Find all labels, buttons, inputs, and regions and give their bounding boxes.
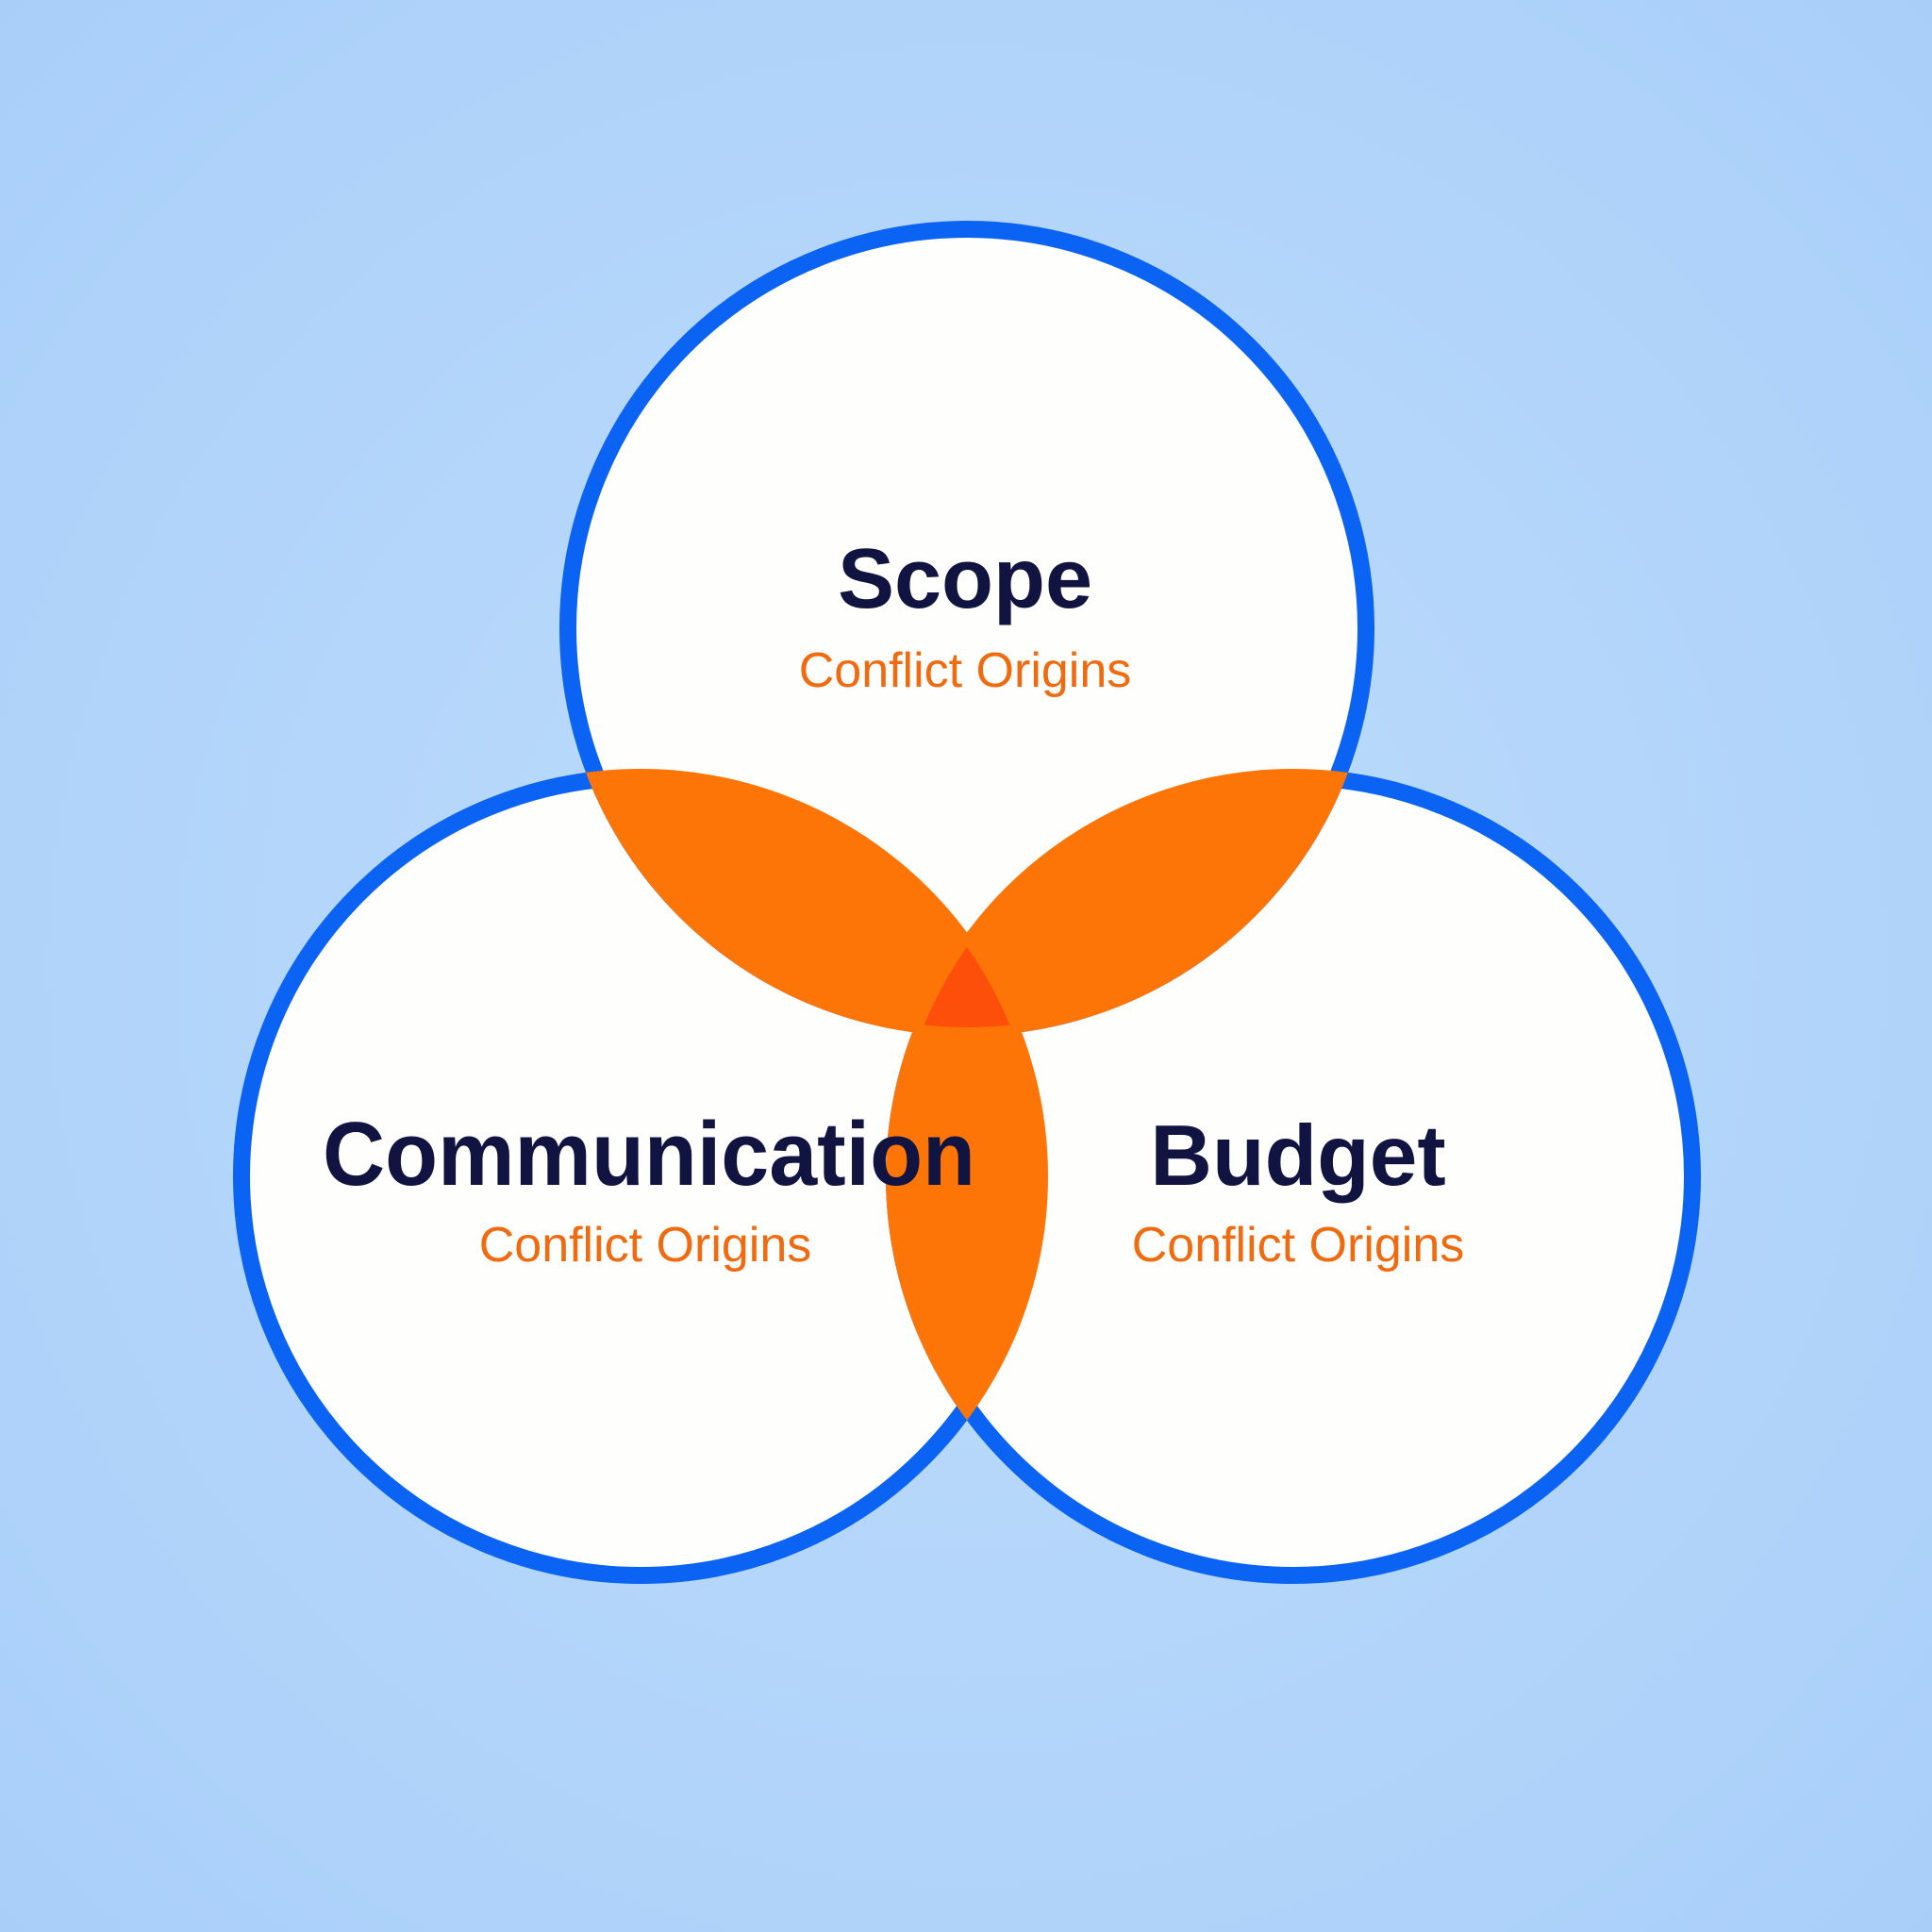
overlap: scope & budget — [967, 769, 1348, 1032]
label: scope: Scope — [838, 532, 1092, 626]
label: scope: Conflict Origins — [799, 643, 1131, 698]
label: communication: Conflict Origins — [479, 1218, 811, 1273]
label: communication: Communication — [323, 1104, 975, 1205]
label: budget — [1132, 1108, 1464, 1273]
circle: scope — [568, 229, 1366, 1027]
circle: budget — [894, 777, 1692, 1575]
circle: communication — [242, 777, 1040, 1575]
label: budget: Conflict Origins — [1132, 1218, 1464, 1273]
venn diagram — [233, 229, 1701, 1584]
label: budget: Budget — [1150, 1108, 1446, 1204]
overlap: center — [924, 947, 1009, 1027]
label: communication — [323, 1104, 975, 1273]
label: scope — [799, 532, 1131, 698]
overlap: communication & budget — [886, 1032, 1048, 1421]
overlap: scope & communication — [586, 769, 967, 1032]
